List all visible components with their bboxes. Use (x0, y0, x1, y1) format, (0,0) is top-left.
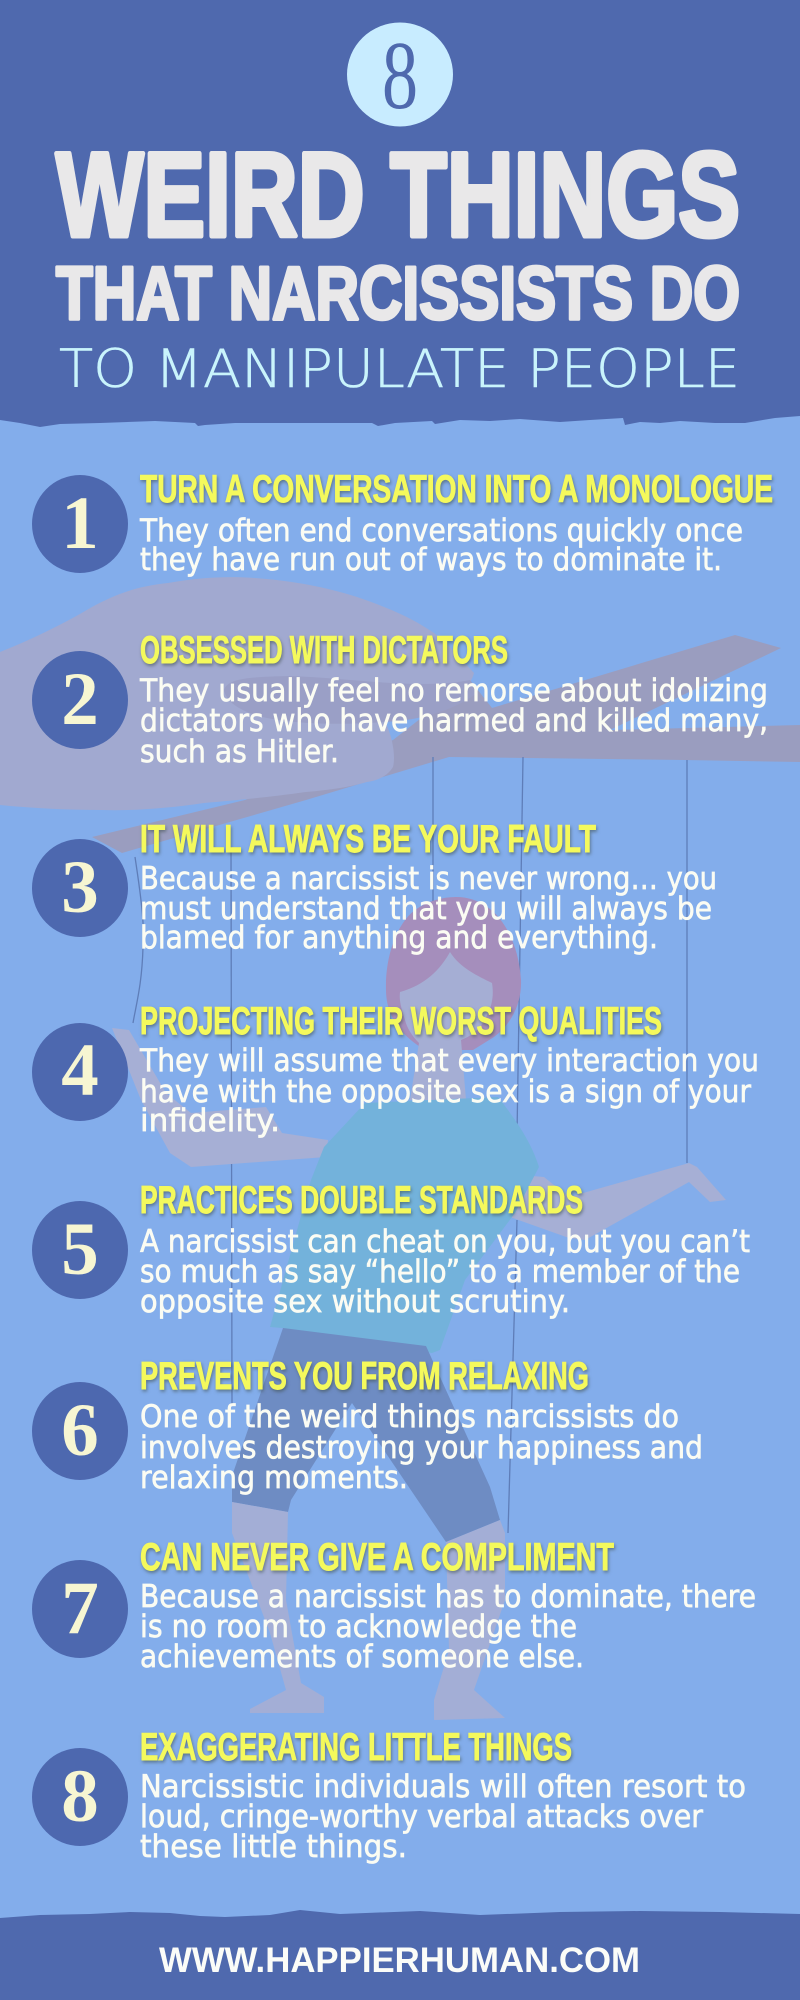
number badge 3: 3 (61, 846, 99, 929)
header badge with number 8: 8 (382, 22, 418, 130)
illustration: face (400, 952, 493, 1100)
footer panel (0, 1910, 800, 2000)
heading 3: IT WILL ALWAYS BE YOUR FAULT (140, 818, 596, 861)
number badge 4: 4 (61, 1029, 99, 1112)
heading 8: EXAGGERATING LITTLE THINGS (140, 1726, 572, 1769)
body 6: involves destroying your happiness and (140, 1430, 703, 1466)
number badge 2: 2 (61, 658, 99, 741)
illustration: right arm (510, 1163, 726, 1240)
body 4: have with the opposite sex is a sign of your (140, 1074, 751, 1110)
illustration: puppeteer hand (0, 577, 474, 810)
body 3: blamed for anything and everything. (140, 920, 658, 956)
body 8 (140, 1769, 746, 1865)
item 8 (32, 1726, 746, 1865)
number badge 1: 1 (61, 482, 99, 565)
illustration: controller bars (92, 635, 800, 853)
item 2 (32, 629, 768, 770)
illustration: shorts (232, 1328, 500, 1542)
footer url: WWW.HAPPIERHUMAN.COM (159, 1941, 640, 1980)
body 3: Because a narcissist is never wrong… you (140, 861, 717, 897)
subtitle: TO MANIPULATE PEOPLE (59, 339, 740, 400)
body 6: One of the weird things narcissists do (140, 1399, 679, 1435)
heading 6: PREVENTS YOU FROM RELAXING (140, 1355, 589, 1398)
body 7: achievements of someone else. (140, 1639, 584, 1675)
body 2: such as Hitler. (140, 734, 339, 770)
heading 5: PRACTICES DOUBLE STANDARDS (140, 1179, 583, 1222)
item 3 (32, 818, 717, 956)
item 1 (32, 468, 773, 578)
illustration: shirt (270, 1097, 539, 1353)
number badge 8: 8 (61, 1755, 99, 1838)
number badge 6: 6 (61, 1389, 99, 1472)
body 4: infidelity. (140, 1103, 280, 1139)
number badge 5: 5 (61, 1208, 99, 1291)
header badge with number 8 (347, 22, 453, 130)
body 3 (140, 861, 717, 956)
item 7 (32, 1536, 756, 1675)
number badge 1 (32, 475, 128, 573)
puppet illustration (0, 577, 800, 1720)
body 7 (140, 1579, 756, 1675)
body 4 (139, 1043, 759, 1139)
illustration: right leg (434, 1520, 505, 1720)
item 4 (32, 1000, 759, 1139)
number badge 8 (32, 1748, 128, 1846)
item 6 (32, 1355, 703, 1496)
illustration: hand shadow (224, 676, 476, 724)
body 1 (139, 513, 743, 578)
body 8: these little things. (140, 1829, 407, 1865)
body 1: they have run out of ways to dominate it. (140, 542, 722, 578)
illustration: hair (386, 897, 521, 1050)
illustration: strings (133, 757, 687, 1533)
number badge 2 (32, 651, 128, 749)
body 5: A narcissist can cheat on you, but you can’t (140, 1224, 750, 1260)
number badge 5 (32, 1201, 128, 1299)
illustration: left leg (232, 1502, 324, 1713)
heading 2: OBSESSED WITH DICTATORS (140, 629, 508, 672)
body 3: must understand that you will always be (140, 891, 712, 927)
item 5 (32, 1179, 750, 1320)
body 7: is no room to acknowledge the (140, 1609, 577, 1645)
body 8: loud, cringe-worthy verbal attacks over (140, 1799, 703, 1835)
body 5: opposite sex without scrutiny. (140, 1284, 570, 1320)
heading 7: CAN NEVER GIVE A COMPLIMENT (140, 1536, 614, 1579)
number badge 7 (32, 1560, 128, 1658)
header panel (0, 0, 800, 427)
illustration: left arm (112, 1028, 328, 1167)
body 8: Narcissistic individuals will often resort to (140, 1769, 746, 1805)
body 5: so much as say “hello” to a member of the (140, 1254, 740, 1290)
number badge 6 (32, 1382, 128, 1480)
body 6: relaxing moments. (140, 1460, 408, 1496)
number badge 7: 7 (61, 1567, 99, 1650)
body 1: They often end conversations quickly once (139, 513, 743, 549)
body 5 (140, 1224, 750, 1320)
number badge 4 (32, 1023, 128, 1121)
number badge 3 (32, 839, 128, 937)
body 7: Because a narcissist has to dominate, there (140, 1579, 756, 1615)
body 2 (139, 673, 768, 770)
body 6 (140, 1399, 703, 1496)
